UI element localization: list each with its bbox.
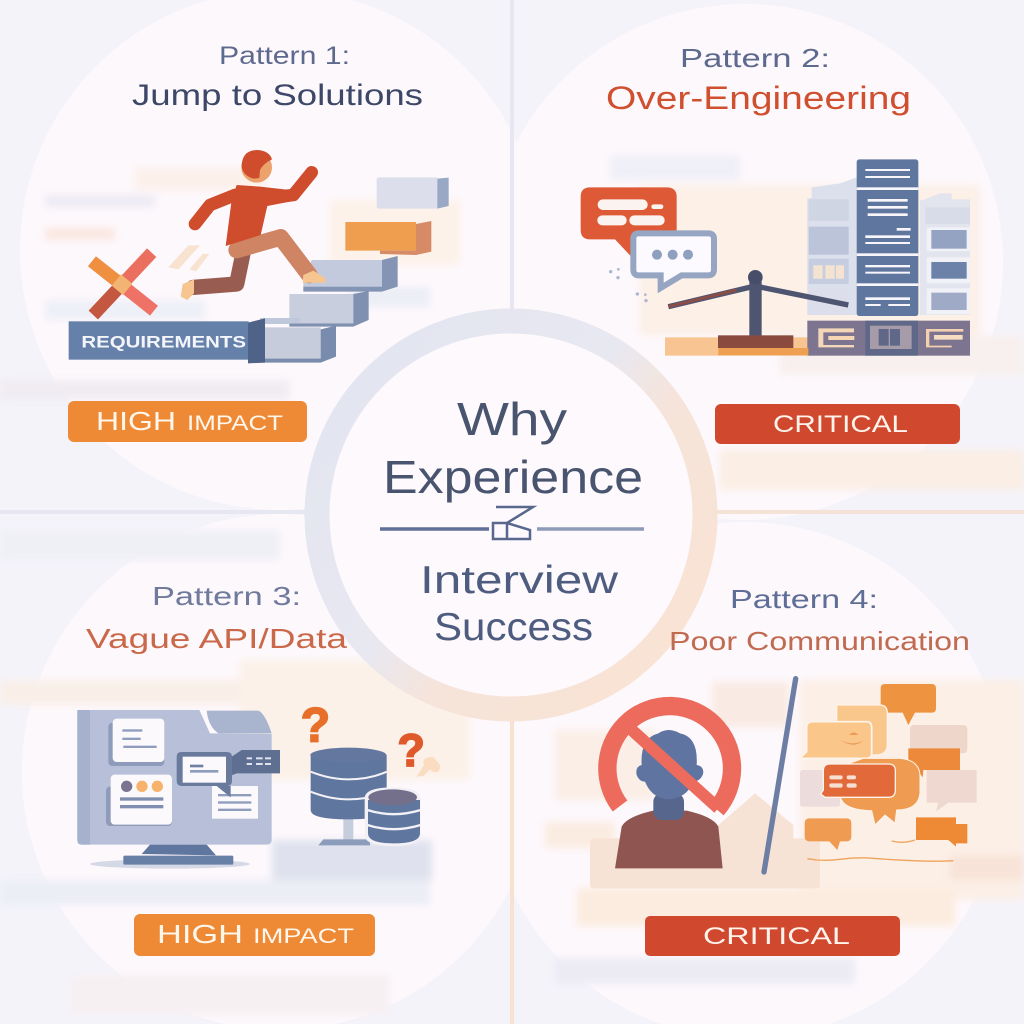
badge: high impact [134,914,375,956]
icon: divider slash [764,679,796,872]
icon: running figure [181,150,326,300]
badge: high impact [68,401,307,442]
badge: critical: CRITICAL [703,923,850,950]
panel: pattern 3 vague api/data [77,581,440,956]
icon: left server tower [807,177,857,315]
heading: over-engineering: Over-Engineering [606,80,911,116]
icon: main server tower [857,159,918,316]
icon: stairs [249,256,398,363]
icon: balance scale [668,270,848,355]
icon: outlined speech bubble [633,233,714,288]
heading: pattern 4 label: Pattern 4: [730,584,878,614]
panel: pattern 1 jump to solutions [68,42,449,442]
divider with icon [380,507,644,539]
label: requirements bar [69,318,265,363]
badge: high impact: HIGH [96,406,176,436]
icon: question marks [301,699,425,776]
illustration: runner on stairs [69,150,449,363]
heading: poor communication: Poor Communication [669,626,970,656]
heading: pattern 1 label: Pattern 1: [219,42,350,70]
badge: high impact: IMPACT [253,925,354,948]
heading: vague api/data: Vague API/Data [86,623,348,654]
heading: pattern 3 label: Pattern 3: [152,581,301,611]
icon: upper blocks [345,177,449,255]
icon: document cards [106,719,258,826]
illustration: muted person and chaotic chat [590,679,977,888]
icon: prohibition sign [607,706,732,809]
icon: orange wash platform [665,337,812,356]
icon: motion marks [168,245,209,271]
panel: pattern 4 poor communication [590,584,977,956]
badge: critical [645,916,900,956]
icon: chat bubbles cluster [800,684,977,861]
badge: critical: CRITICAL [773,411,908,438]
icon: person silhouette [615,730,723,868]
heading: pattern 2 label: Pattern 2: [680,43,830,73]
label: requirements bar: REQUIREMENTS [81,332,246,351]
icon: small database [365,787,421,846]
badge: high impact: IMPACT [187,412,283,435]
icon: monitor [77,710,272,869]
icon: chat bubbles on monitor [177,750,280,797]
badge: high impact: HIGH [157,919,243,949]
title: interview success: Interview [420,559,619,602]
icon: small puff [417,757,440,777]
icon: right server tower [920,193,970,315]
icon: question marks: ? [397,725,425,776]
title: interview success: Success [434,606,593,649]
icon: question marks: ? [301,699,330,753]
icon: base blocks [807,321,970,356]
heading: jump to solutions: Jump to Solutions [132,79,423,112]
center hub: ring and title [317,321,705,709]
illustration: imbalanced scale and server stack [581,159,970,356]
icon: red speech bubble [581,187,677,256]
icon: large database [310,748,387,845]
icon: background mountain [590,793,820,888]
badge: critical [715,404,960,444]
illustration: monitor and databases [77,699,440,869]
panel: pattern 2 over-engineering [581,43,970,444]
title: why experience: Why [457,393,567,445]
icon: red X [92,253,154,315]
title: why experience: Experience [383,451,643,503]
icon: small dots [609,268,648,302]
